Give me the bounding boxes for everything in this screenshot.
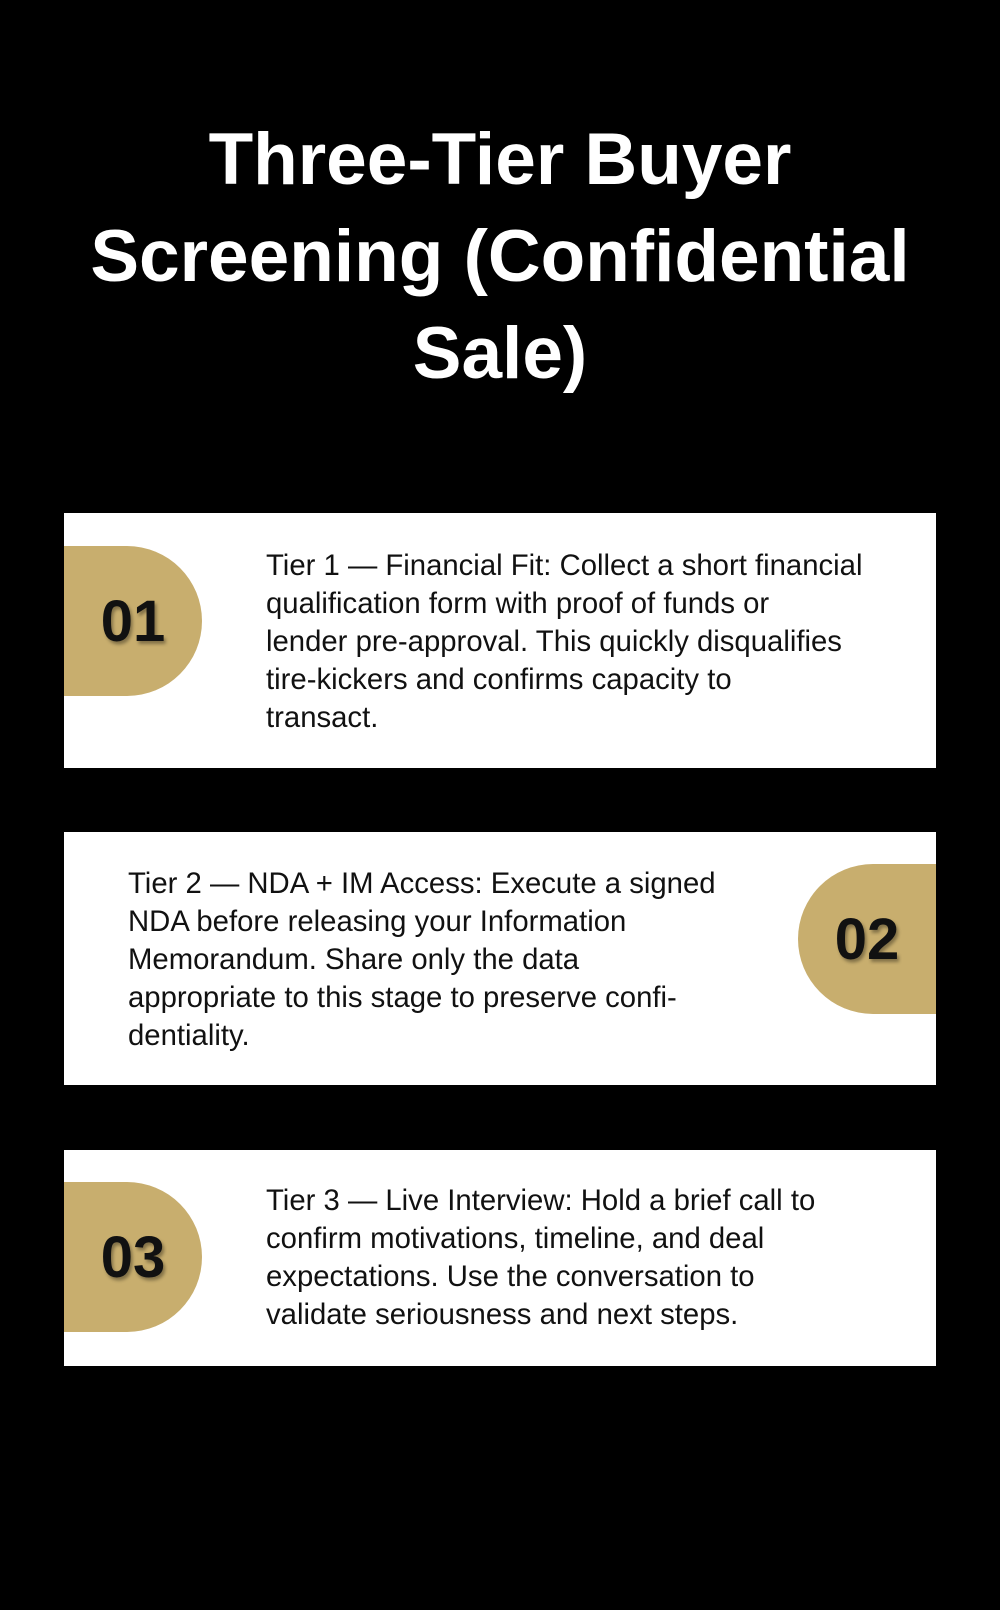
panel: tier 2 (64, 832, 936, 1085)
badge: 03 (64, 1182, 202, 1332)
text: tier 3 description: validate seriousness and next steps. (266, 1298, 738, 1331)
text: tier 1 description: transact. (266, 701, 378, 734)
text: tier 1 description: lender pre-approval. This quickly disqualifies (266, 625, 842, 658)
text: tier 2 description (128, 867, 716, 1052)
text: tier 1 description (266, 549, 862, 734)
text: tier 3 description: expectations. Use the conversation to (266, 1260, 755, 1293)
title: Three-Tier Buyer (209, 119, 791, 200)
text: tier 3 description (266, 1184, 815, 1331)
text: tier 3 description: Tier 3 — Live Interview: Hold a brief call to (266, 1184, 815, 1217)
text: tier 2 description: dentiality. (128, 1019, 250, 1052)
badge: 03: 03 (101, 1224, 165, 1290)
badge: 02: 02 (835, 906, 899, 972)
title (90, 119, 910, 394)
text: tier 3 description: confirm motivations, timeline, and deal (266, 1222, 764, 1255)
text: tier 2 description: NDA before releasing your Information (128, 905, 626, 938)
text: tier 1 description: Tier 1 — Financial Fit: Collect a short financial (266, 549, 862, 582)
badge: 01: 01 (101, 588, 165, 654)
text: tier 2 description: appropriate to this stage to preserve confi- (128, 981, 677, 1014)
text: tier 1 description: qualification form with proof of funds or (266, 587, 769, 620)
badge: 02 (798, 864, 936, 1014)
badge: 01 (64, 546, 202, 696)
text: tier 1 description: tire-kickers and confirms capacity to (266, 663, 732, 696)
title: Sale) (413, 313, 587, 394)
text: tier 2 description: Tier 2 — NDA + IM Access: Execute a signed (128, 867, 716, 900)
text: tier 2 description: Memorandum. Share only the data (128, 943, 579, 976)
panel: tier 3 (64, 1150, 936, 1366)
title: Screening (Confidential (90, 216, 910, 297)
panel: tier 1 (64, 513, 936, 768)
